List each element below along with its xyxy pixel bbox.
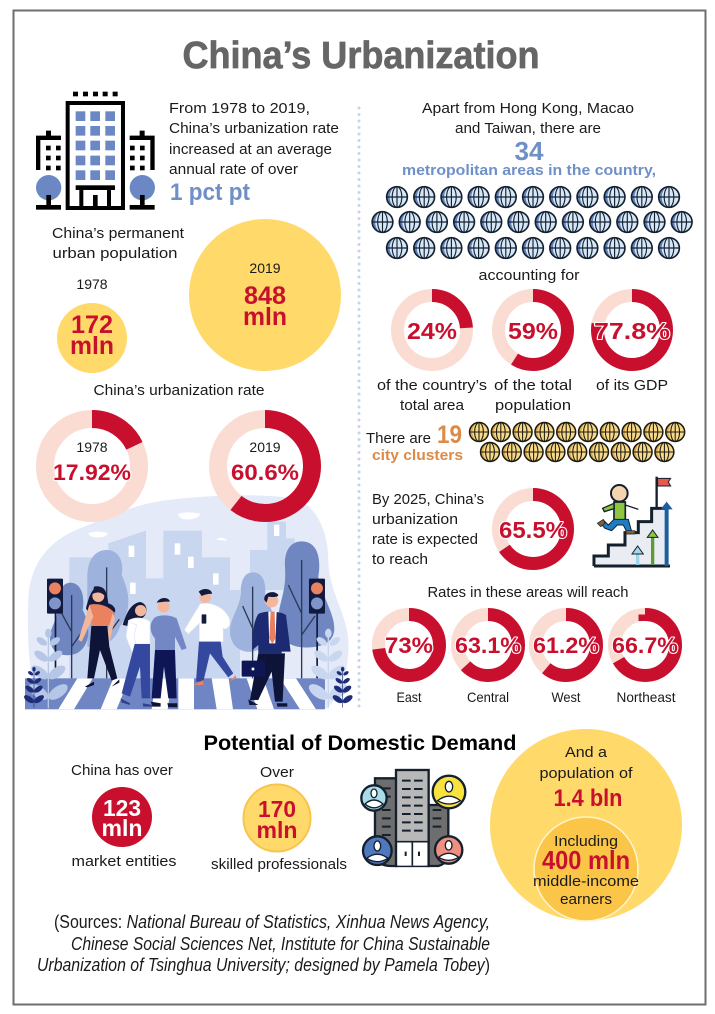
text: 19 city clusters: [366, 421, 463, 464]
donut: Central 63.1%: [455, 614, 521, 705]
left traffic light: [47, 579, 63, 678]
title: China’s Urbanization: [182, 35, 540, 77]
text block: 2025 forecast: urbanization: [372, 511, 458, 528]
donut: Central 63.1%: Central: [467, 689, 509, 705]
stat: 170 mln skilled professionals: skilled professionals: [211, 856, 347, 873]
bubble: population of 1.4 bln: [490, 729, 682, 921]
icon: office building with trees: [36, 92, 155, 210]
stat: 123 mln market entities: 123: [103, 795, 141, 821]
text block: annual rate increase: [169, 100, 339, 206]
sources: Urbanization of Tsinghua University; designed by Pamela Tobey): [37, 955, 490, 975]
text block: metropolitan areas: and Taiwan, there are: [455, 120, 601, 137]
donut: 59% of total population: population: [495, 397, 571, 414]
donut: 77.8% of GDP: 77.8%: [594, 318, 670, 344]
icon: person climbing stairs to flag: [594, 477, 673, 566]
donut: 2019 urbanization rate: 60.6%: [231, 460, 299, 485]
heading: urbanization rate: China’s urbanization rate: [94, 382, 264, 399]
donut: 59% of total population: [494, 296, 572, 414]
sources: (Sources: National Bureau of Statistics, Xinhua News Agency,: [54, 912, 490, 932]
donut: 65.5% in 2025: [498, 494, 568, 564]
donut: 2019 urbanization rate: [218, 419, 312, 513]
bubble: 1978 population: [57, 276, 127, 373]
stat: 170 mln skilled professionals: 170: [258, 796, 296, 822]
donut: 24% of total area: 24%: [407, 318, 457, 344]
donut: East 73%: East: [396, 689, 422, 705]
donut: 77.8% of GDP: of its GDP: [596, 377, 668, 394]
text block: metropolitan areas: 34: [514, 136, 544, 166]
bubble: population of 1.4 bln: population of: [540, 765, 633, 782]
heading: permanent urban population: [52, 225, 185, 262]
text block: annual rate increase: China’s urbanization rate: [169, 120, 339, 137]
sources: Chinese Social Sciences Net, Institute for China Sustainable: [71, 934, 490, 954]
right traffic light: [309, 579, 325, 678]
text block: metropolitan areas: Apart from Hong Kong, Macao: [422, 100, 634, 117]
text block: annual rate increase: 1 pct pt: [170, 179, 250, 206]
illustration: pedestrians crossing a city street: [23, 495, 354, 709]
person: woman in orange top: [78, 586, 119, 687]
bubble: 1978 population: mln: [70, 332, 114, 360]
bubble: 2019 population: 2019: [249, 260, 281, 276]
text block: 2025 forecast: [372, 491, 484, 568]
background blob: [28, 495, 348, 708]
icon row: 34 globes: [372, 187, 692, 258]
stat: 170 mln skilled professionals: mln: [256, 817, 298, 843]
stat: 123 mln market entities: [71, 762, 176, 870]
text: 19 city clusters: city clusters: [372, 447, 463, 464]
bubble: 1978 population: 1978: [76, 276, 108, 292]
stat: 123 mln market entities: market entities: [72, 853, 176, 870]
bubble: 400 mln middle-income earners: earners: [560, 891, 612, 908]
donut: 59% of total population: of the total: [494, 377, 572, 394]
donut: Central 63.1%: 63.1%: [455, 633, 521, 658]
donut: Northeast 66.7%: [612, 614, 678, 705]
heading: potential of domestic demand: Potential of Domestic Demand: [204, 732, 516, 755]
text block: metropolitan areas: [402, 100, 656, 179]
text: accounting for: accounting for: [478, 267, 580, 284]
icon: office towers with people: [361, 770, 465, 866]
icon row: 19 yellow globes: [469, 423, 685, 461]
donut: 77.8% of GDP: [594, 296, 670, 394]
bubble: 2019 population: [189, 219, 341, 371]
person: man in white shirt with phone: [184, 589, 236, 685]
heading: permanent urban population: urban population: [52, 245, 178, 262]
stat: 123 mln market entities: mln: [102, 815, 142, 841]
donut: 24% of total area: total area: [400, 397, 465, 414]
donut: East 73%: [378, 614, 440, 705]
bubble: population of 1.4 bln: 1.4 bln: [554, 785, 622, 812]
sources: [37, 912, 490, 975]
donut: 65.5% in 2025: 65.5%: [499, 517, 567, 543]
text: 19 city clusters: There are: [366, 430, 431, 447]
trees: [87, 550, 274, 652]
bubble: 1978 population: 172: [71, 311, 113, 339]
right plants: [306, 629, 354, 708]
donut: Northeast 66.7%: Northeast: [616, 689, 676, 705]
text block: 2025 forecast: By 2025, China’s: [372, 491, 484, 508]
text block: 2025 forecast: to reach: [372, 551, 428, 568]
donut: 59% of total population: 59%: [508, 318, 558, 344]
donut: 24% of total area: [377, 296, 487, 414]
bubble: 2019 population: 848: [244, 282, 286, 310]
donut: West 61.2%: West: [552, 689, 581, 705]
bubble: 400 mln middle-income earners: Including: [554, 833, 618, 850]
bubble: 400 mln middle-income earners: [533, 817, 639, 921]
person: man in blue sweater: [151, 598, 187, 707]
stat: 170 mln skilled professionals: [211, 764, 347, 873]
donut: West 61.2%: [533, 614, 599, 705]
skyline: [69, 522, 295, 678]
crosswalk: [25, 678, 325, 709]
text block: annual rate increase: From 1978 to 2019,: [169, 100, 310, 117]
bubble: population of 1.4 bln: And a: [565, 744, 608, 761]
text: 19 city clusters: 19: [437, 421, 462, 449]
text block: 2025 forecast: rate is expected: [372, 531, 478, 548]
donut: 1978 urbanization rate: [45, 419, 139, 513]
donut: East 73%: 73%: [385, 633, 433, 658]
person: businessman with briefcase: [242, 592, 291, 707]
heading: permanent urban population: China’s permanent: [52, 225, 185, 242]
person: woman in white top: [121, 602, 153, 707]
text block: metropolitan areas: metropolitan areas in the country,: [402, 162, 656, 179]
bubble: 400 mln middle-income earners: 400 mln: [542, 845, 630, 875]
donut: 1978 urbanization rate: 17.92%: [53, 460, 131, 485]
bubble: 400 mln middle-income earners: middle-income: [533, 873, 639, 890]
donut: 1978 urbanization rate: 1978: [76, 439, 108, 455]
donut: Northeast 66.7%: 66.7%: [612, 633, 678, 658]
text block: annual rate increase: annual rate of over: [169, 161, 298, 178]
heading: regional rates: Rates in these areas will reach: [428, 584, 628, 601]
left plants: [23, 629, 70, 708]
donut: 2019 urbanization rate: 2019: [249, 439, 281, 455]
bubble: 2019 population: mln: [243, 303, 287, 331]
donut: West 61.2%: 61.2%: [533, 633, 599, 658]
donut: 24% of total area: of the country’s: [377, 377, 487, 394]
text block: annual rate increase: increased at an average: [169, 141, 332, 158]
stat: 123 mln market entities: China has over: [71, 762, 173, 779]
stat: 170 mln skilled professionals: Over: [260, 764, 294, 781]
